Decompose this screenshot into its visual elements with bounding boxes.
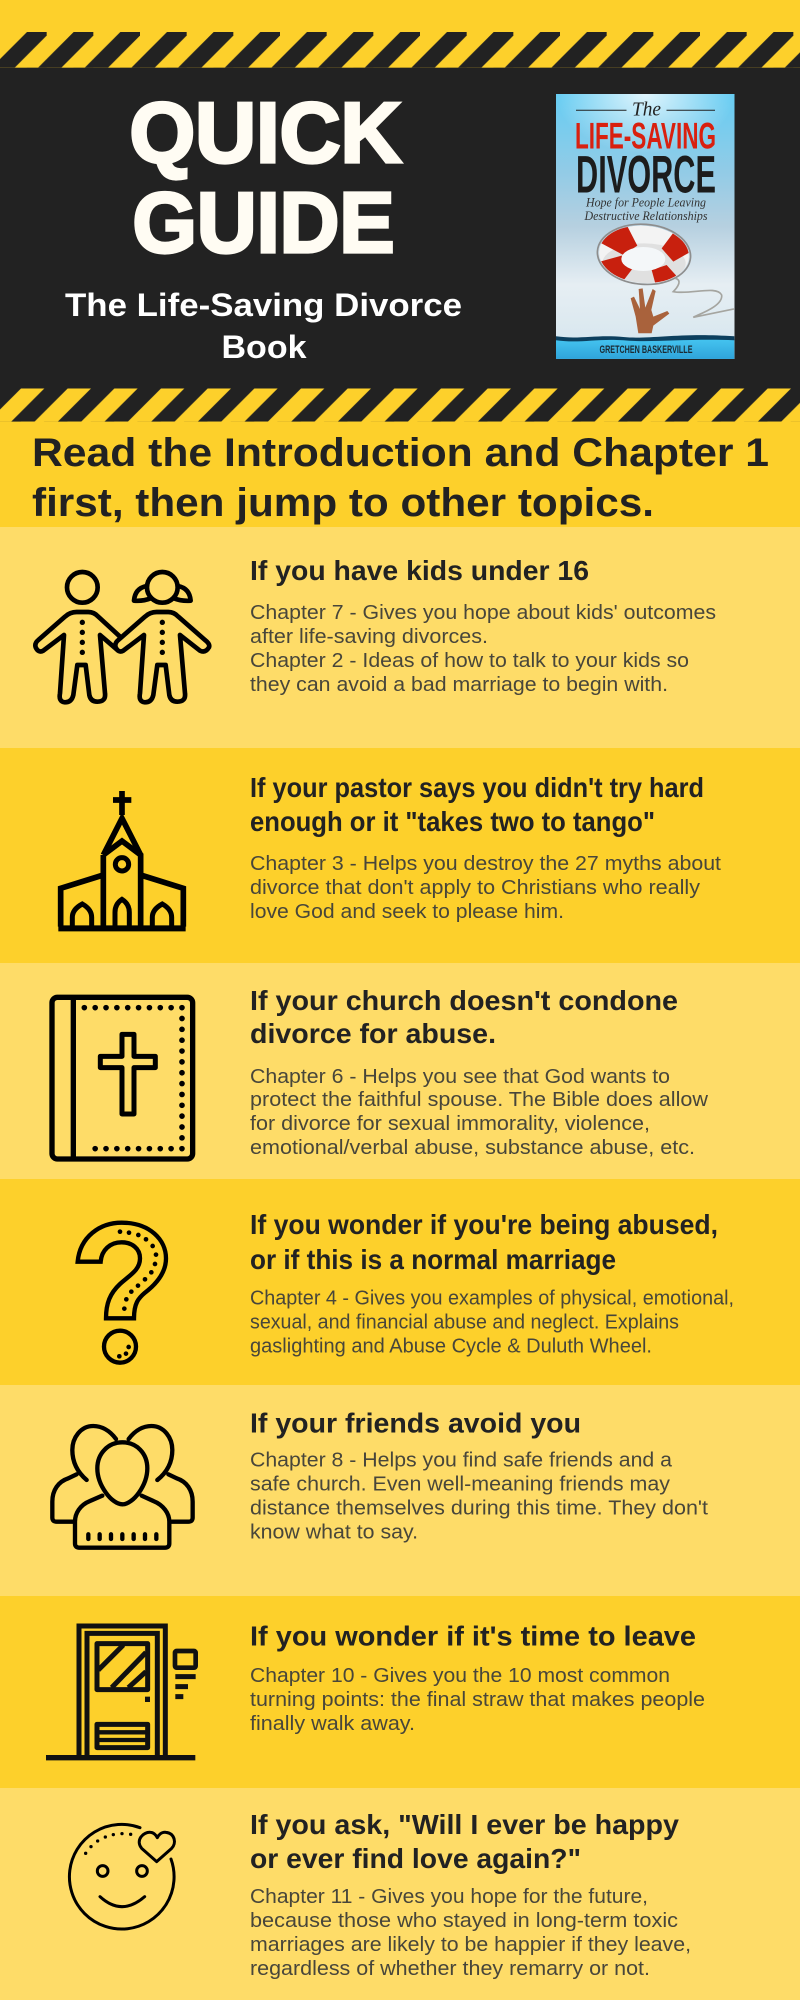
body text: regardless of whether they remarry or not. xyxy=(250,1958,650,1980)
body text: emotional/verbal abuse, substance abuse, etc. xyxy=(250,1137,695,1159)
panel: happy again xyxy=(0,1788,800,2000)
body text: Chapter 4 - Gives you examples of physical, emotional, xyxy=(250,1288,734,1310)
panel: time to leave xyxy=(0,1596,800,1788)
heading: or if this is a normal marriage xyxy=(250,1244,616,1275)
heading: If you wonder if it's time to leave xyxy=(250,1620,696,1652)
heading xyxy=(250,1209,718,1275)
body text: for divorce for sexual immorality, violence, xyxy=(250,1113,650,1135)
subtitle: Book xyxy=(222,329,307,365)
body text xyxy=(250,1450,708,1544)
icon: two children holding hands xyxy=(35,572,209,702)
body text: Chapter 8 - Helps you find safe friends and a xyxy=(250,1450,673,1472)
heading: enough or it "takes two to tango" xyxy=(250,806,655,837)
body text xyxy=(250,602,716,696)
heading: If you wonder if you're being abused, xyxy=(250,1209,718,1240)
yellow intro band xyxy=(0,388,800,527)
icon: bible xyxy=(52,997,193,1159)
body text: gaslighting and Abuse Cycle & Duluth Wheel. xyxy=(250,1336,652,1358)
icon: group of people xyxy=(52,1426,193,1548)
body text: turning points: the final straw that makes people xyxy=(250,1689,705,1711)
heading: If your friends avoid you xyxy=(250,1408,581,1438)
book cover: The xyxy=(632,99,661,121)
panel: friends avoid you xyxy=(0,1385,800,1596)
intro text: Read the Introduction and Chapter 1 xyxy=(32,431,769,475)
panel: pastor xyxy=(0,748,800,963)
icon: door xyxy=(46,1626,196,1758)
top yellow band xyxy=(0,0,800,32)
heading: If your church doesn't condone xyxy=(250,985,678,1016)
body text: distance themselves during this time. They don't xyxy=(250,1498,708,1520)
title xyxy=(130,86,402,271)
title: QUICK xyxy=(130,86,402,181)
heading: If your pastor says you didn't try hard xyxy=(250,772,704,803)
body text xyxy=(250,1665,705,1735)
heading: or ever find love again?" xyxy=(250,1843,581,1874)
subtitle: The Life-Saving Divorce xyxy=(65,287,462,323)
body text xyxy=(250,1886,691,1980)
book cover: Hope for People Leaving xyxy=(585,195,706,210)
body text: Chapter 11 - Gives you hope for the future, xyxy=(250,1886,648,1908)
panel: being abused xyxy=(0,1179,800,1385)
book cover: LIFE-SAVING xyxy=(575,115,716,156)
body text: Chapter 10 - Gives you the 10 most common xyxy=(250,1665,670,1687)
body text: love God and seek to please him. xyxy=(250,901,564,923)
book cover: GRETCHEN BASKERVILLE xyxy=(600,344,692,356)
body text xyxy=(250,1066,709,1159)
lower hazard stripes xyxy=(0,388,800,422)
body text: sexual, and financial abuse and neglect. Explains xyxy=(250,1312,679,1334)
body text: Chapter 3 - Helps you destroy the 27 myths about xyxy=(250,853,721,875)
icon: church xyxy=(58,791,186,928)
heading xyxy=(250,772,704,837)
body text: after life-saving divorces. xyxy=(250,626,488,648)
icon: smiling face with heart xyxy=(69,1824,174,1929)
body text xyxy=(250,1288,734,1358)
body text: Chapter 2 - Ideas of how to talk to your kids so xyxy=(250,650,689,672)
heading xyxy=(250,1809,679,1874)
heading: If you ask, "Will I ever be happy xyxy=(250,1809,679,1840)
heading: If you have kids under 16 xyxy=(250,555,589,586)
intro text: first, then jump to other topics. xyxy=(32,481,654,525)
book cover xyxy=(556,94,734,359)
title: GUIDE xyxy=(132,176,394,271)
intro text xyxy=(32,431,769,525)
panel: church and abuse xyxy=(0,963,800,1179)
body text: divorce that don't apply to Christians who really xyxy=(250,877,700,899)
body text xyxy=(250,853,721,923)
body text: marriages are likely to be happier if they leave, xyxy=(250,1934,691,1956)
body text: finally walk away. xyxy=(250,1713,415,1735)
book cover: Destructive Relationships xyxy=(584,208,708,223)
icon: question mark xyxy=(78,1223,166,1363)
body text: because those who stayed in long-term toxic xyxy=(250,1910,678,1932)
body text: Chapter 6 - Helps you see that God wants to xyxy=(250,1066,670,1088)
body text: Chapter 7 - Gives you hope about kids' outcomes xyxy=(250,602,716,624)
panel: dark header xyxy=(0,68,800,389)
body text: they can avoid a bad marriage to begin with. xyxy=(250,674,668,696)
body text: know what to say. xyxy=(250,1522,418,1544)
subtitle xyxy=(65,287,462,365)
heading: divorce for abuse. xyxy=(250,1018,496,1049)
heading xyxy=(250,985,678,1049)
top hazard stripes xyxy=(0,32,800,68)
panel: kids under 16 xyxy=(0,527,800,748)
body text: safe church. Even well-meaning friends may xyxy=(250,1474,670,1496)
body text: protect the faithful spouse. The Bible does allow xyxy=(250,1089,709,1111)
